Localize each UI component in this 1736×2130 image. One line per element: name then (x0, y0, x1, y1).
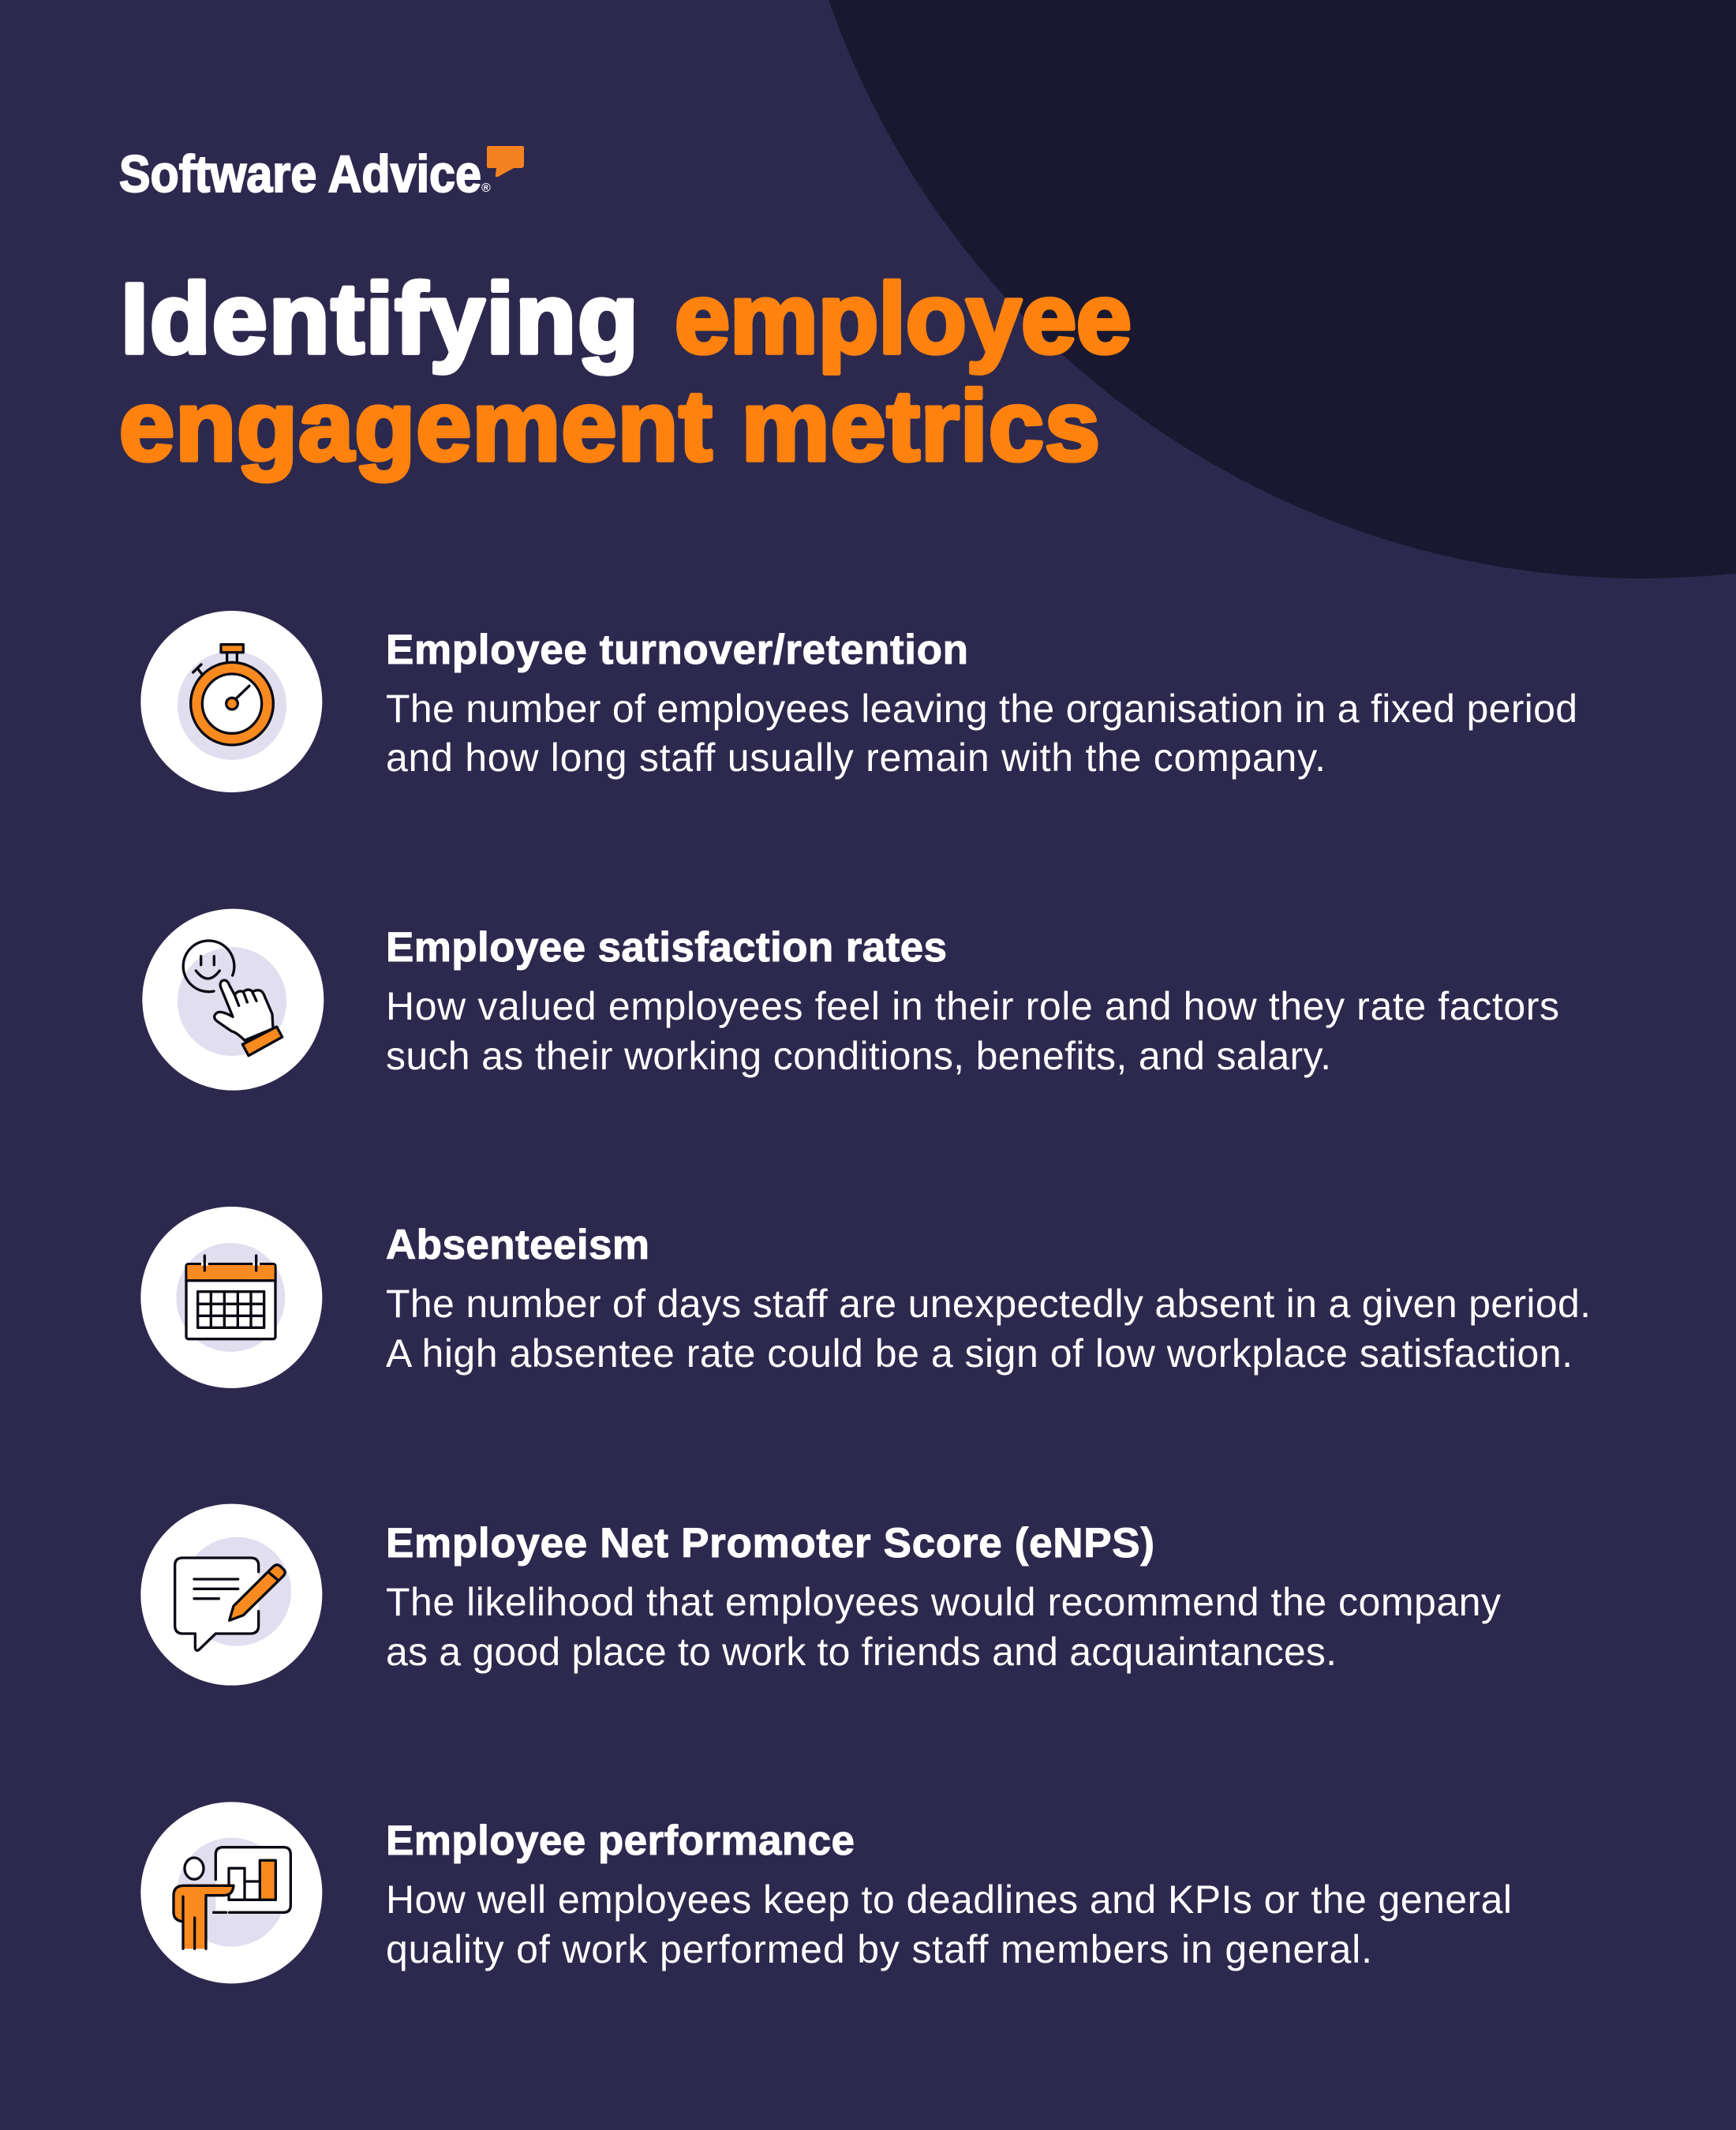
description (386, 1580, 1501, 1674)
panel: employee satisfaction rates (142, 909, 1559, 1091)
description: How valued employees feel in their role and how they rate factors (386, 984, 1559, 1028)
description: The number of employees leaving the organisation in a fixed period (386, 687, 1577, 731)
icon: calendar (140, 1207, 322, 1388)
description: A high absentee rate could be a sign of low workplace satisfaction. (386, 1331, 1573, 1376)
heading: Absenteeism (386, 1222, 649, 1268)
description: The number of days staff are unexpectedly absent in a given period. (386, 1282, 1591, 1326)
panel: employee net promoter score (140, 1504, 1501, 1686)
icon: speech bubble and pencil (140, 1504, 322, 1686)
heading: Employee performance (386, 1817, 855, 1864)
icon: presenter with bar chart (140, 1802, 322, 1983)
description (386, 984, 1559, 1078)
title: Identifying (121, 263, 638, 374)
heading: Employee Net Promoter Score (eNPS) (386, 1520, 1154, 1567)
panel: employee turnover/retention (140, 611, 1577, 792)
description: as a good place to work to friends and acquaintances. (386, 1630, 1337, 1674)
icon: smiley and pointing hand (142, 909, 324, 1091)
logo: Software Advice: ® (481, 182, 491, 195)
panel: absenteeism (140, 1207, 1591, 1388)
description: such as their working conditions, benefits, and salary. (386, 1034, 1331, 1078)
description (386, 1877, 1512, 1971)
heading: Employee turnover/retention (386, 627, 968, 673)
description: The likelihood that employees would recommend the company (386, 1580, 1501, 1624)
description (386, 1282, 1591, 1376)
title: engagement metrics (119, 370, 1100, 481)
title (119, 263, 1132, 481)
description: and how long staff usually remain with the company. (386, 736, 1326, 780)
icon: stopwatch (140, 611, 322, 792)
description: How well employees keep to deadlines and KPIs or the general (386, 1877, 1512, 1922)
logo: Software Advice: Software Advice (119, 144, 481, 203)
title: employee (675, 263, 1132, 374)
heading: Employee satisfaction rates (386, 924, 947, 971)
panel: employee performance (140, 1802, 1512, 1983)
dark corner circle (781, 0, 1736, 578)
description: quality of work performed by staff members in general. (386, 1927, 1372, 1971)
description (386, 687, 1577, 780)
